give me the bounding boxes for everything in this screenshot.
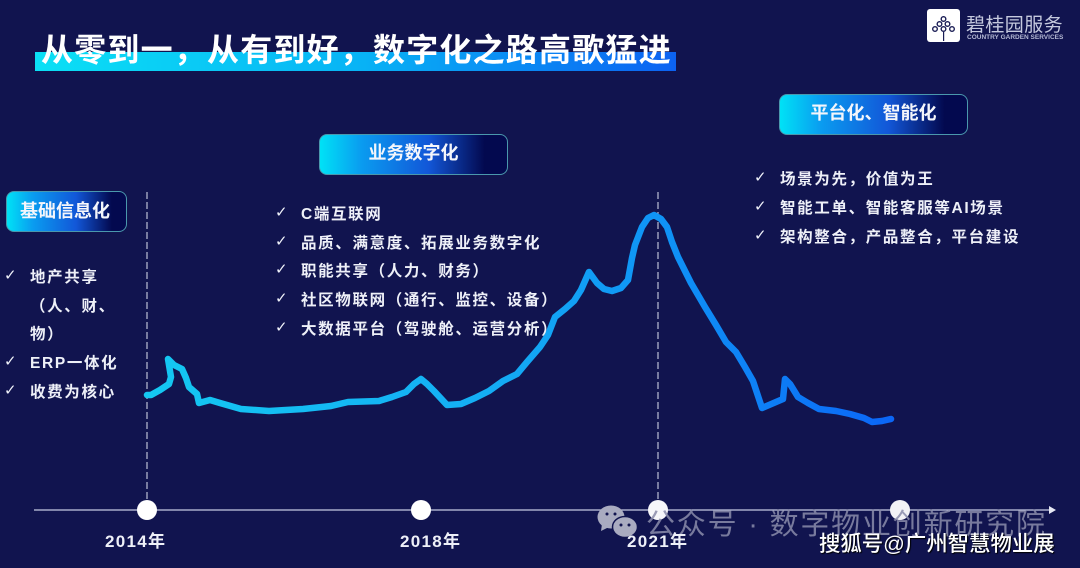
icon: logo tree (927, 9, 960, 42)
logo name: 碧桂园服务 (966, 15, 1063, 36)
logo (927, 9, 1064, 42)
stage pill: 业务数字化: 业务数字化 (368, 143, 458, 163)
list: 基础信息化: ✓ (4, 381, 17, 399)
list: 业务数字化 (275, 203, 558, 338)
stage pill: 基础信息化 (6, 191, 127, 232)
list: 平台化、智能化 (754, 168, 1020, 246)
item: 地产共享 (30, 269, 99, 286)
list: 业务数字化: ✓ (275, 289, 288, 307)
list: 业务数字化: ✓ (275, 203, 288, 221)
list: 平台化、智能化: ✓ (754, 197, 767, 215)
item: 智能工单、智能客服等AI场景 (780, 200, 1005, 217)
stage pill: 平台化、智能化: 平台化、智能化 (810, 103, 936, 123)
item (275, 203, 382, 223)
watermark text: 公众号 · 数字物业创新研究院 (646, 509, 1047, 541)
item continuation: （人、财、 (30, 298, 116, 315)
timeline dot 2021 (648, 500, 668, 520)
item: 职能共享（人力、财务） (301, 263, 490, 280)
title: 从零到一，从有到好，数字化之路高歌猛进 (41, 32, 672, 68)
list: 平台化、智能化: ✓ (754, 168, 767, 186)
list: 平台化、智能化: ✓ (754, 226, 767, 244)
stage pill: 业务数字化 (319, 134, 508, 175)
item (4, 381, 116, 401)
item: 场景为先，价值为王 (780, 171, 934, 188)
line chart curve (147, 215, 891, 422)
item: 架构整合，产品整合，平台建设 (780, 229, 1020, 246)
list: 业务数字化: ✓ (275, 260, 288, 278)
timeline dot end (890, 500, 910, 520)
item: 社区物联网（通行、监控、设备） (301, 292, 558, 309)
axis arrow (34, 506, 1056, 514)
list: 基础信息化: ✓ (4, 266, 17, 284)
dashed marker 2021 (657, 192, 659, 500)
item: 收费为核心 (30, 384, 116, 401)
list: 基础信息化 (4, 266, 118, 401)
item (4, 352, 118, 372)
logo english name: COUNTRY GARDEN SERVICES (967, 34, 1063, 41)
year label 2021: 2021年 (627, 532, 688, 551)
title highlight bar (35, 52, 676, 71)
list: 基础信息化: ✓ (4, 352, 17, 370)
item: 大数据平台（驾驶舱、运营分析） (301, 321, 558, 338)
year label 2018: 2018年 (400, 532, 461, 551)
icon: wechat watermark (598, 506, 637, 537)
list: 业务数字化: ✓ (275, 318, 288, 336)
dashed marker 2014 (146, 192, 148, 500)
stage pill: 平台化、智能化 (779, 94, 968, 135)
item: 品质、满意度、拓展业务数字化 (301, 235, 541, 252)
year label 2014: 2014年 (105, 532, 166, 551)
timeline dot 2018 (411, 500, 431, 520)
item (4, 266, 99, 286)
list: 业务数字化: ✓ (275, 232, 288, 250)
item continuation: 物） (30, 326, 64, 343)
source watermark: 搜狐号@广州智慧物业展 (819, 532, 1055, 556)
item: ERP一体化 (30, 355, 118, 372)
item: C端互联网 (301, 206, 382, 223)
timeline dot 2014 (137, 500, 157, 520)
stage pill: 基础信息化: 基础信息化 (20, 201, 110, 221)
